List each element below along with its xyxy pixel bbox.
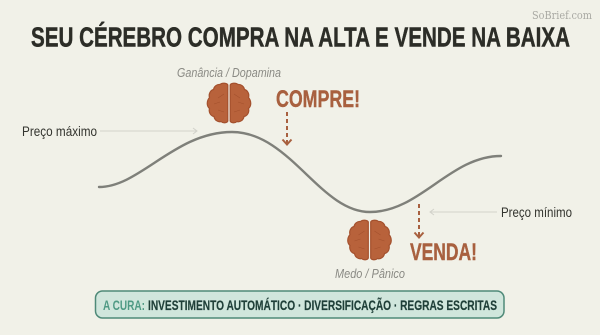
price curve — [99, 132, 501, 212]
watermark: SoBrief.com — [532, 9, 592, 22]
arrow: sell down — [414, 204, 424, 238]
icon: brain top — [207, 83, 251, 123]
icon: brain bottom — [348, 220, 391, 260]
label: max price: Preço máximo — [22, 124, 97, 139]
label: greed dopamine: Ganância / Dopamina — [177, 65, 281, 80]
label: fear panic: Medo / Pânico — [335, 266, 405, 281]
callout: the cure: A CURA: — [103, 297, 145, 313]
label: min price: Preço mínimo — [501, 205, 572, 220]
arrow: to min price — [430, 209, 497, 215]
label: buy: COMPRE! — [276, 86, 360, 113]
arrow: to max price — [100, 128, 197, 134]
arrow: buy down — [282, 112, 292, 144]
callout: the cure — [96, 291, 504, 318]
label: sell: VENDA! — [410, 239, 477, 266]
